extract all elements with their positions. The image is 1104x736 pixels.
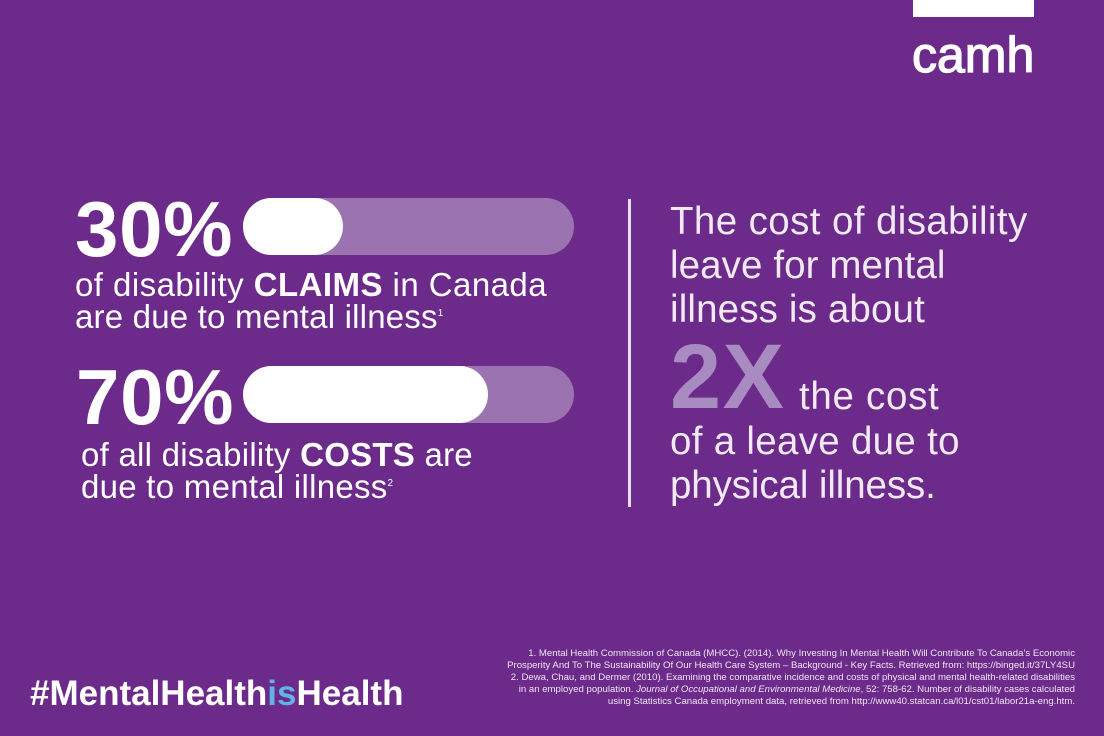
stat number 70%: 70% bbox=[76, 353, 234, 441]
panel: 70% costs statistic bbox=[76, 353, 574, 505]
costs description: due to mental illness2 bbox=[81, 468, 393, 505]
references bbox=[507, 648, 1075, 707]
claims description: are due to mental illness1 bbox=[75, 298, 443, 335]
costs description bbox=[81, 436, 473, 505]
references: 2. Dewa, Chau, and Dermer (2010). Examining the comparative incidence and costs of physical and mental health-related disabilities bbox=[511, 672, 1075, 683]
bar fill bbox=[243, 366, 488, 423]
progress bar 70% bbox=[243, 366, 574, 423]
costs description: of all disability COSTS are bbox=[81, 436, 473, 473]
intro text bbox=[670, 200, 1028, 331]
references: 1. Mental Health Commission of Canada (MHCC). (2014). Why Investing In Mental Health Will Contribute To Canada’s Economic bbox=[528, 648, 1075, 659]
logo block: camh bbox=[912, 0, 1034, 83]
vertical divider bbox=[628, 199, 631, 507]
bar fill bbox=[243, 198, 343, 255]
closing text: the cost bbox=[799, 375, 939, 418]
logo wordmark: camh bbox=[912, 27, 1034, 83]
references: in an employed population. Journal of Occupational and Environmental Medicine, 52: 758-62. Number of disability cases calculated bbox=[519, 684, 1075, 695]
panel: cost comparison text bbox=[670, 200, 1028, 507]
closing text continued: physical illness. bbox=[670, 464, 936, 507]
panel: 30% claims statistic bbox=[75, 185, 574, 335]
intro text: illness is about bbox=[670, 288, 925, 331]
stat number 30%: 30% bbox=[75, 185, 233, 273]
progress bar 30% bbox=[243, 198, 574, 255]
2X figure: 2X bbox=[670, 326, 786, 428]
closing text continued: of a leave due to bbox=[670, 420, 960, 463]
claims description: of disability CLAIMS in Canada bbox=[75, 266, 547, 303]
logo white bar bbox=[913, 0, 1034, 17]
intro text: leave for mental bbox=[670, 244, 946, 287]
claims description bbox=[75, 266, 547, 335]
closing text continued bbox=[670, 420, 960, 507]
intro text: The cost of disability bbox=[670, 200, 1028, 243]
references: using Statistics Canada employment data, retrieved from http://www40.statcan.ca/l01/cst01/labor21a-eng.htm. bbox=[608, 696, 1075, 707]
references: Prosperity And To The Sustainability Of Our Health Care System – Background - Key Facts. Retrieved from: https://binged.it/37LY4SU bbox=[507, 660, 1075, 671]
hashtag: #MentalHealthisHealth bbox=[30, 674, 403, 713]
